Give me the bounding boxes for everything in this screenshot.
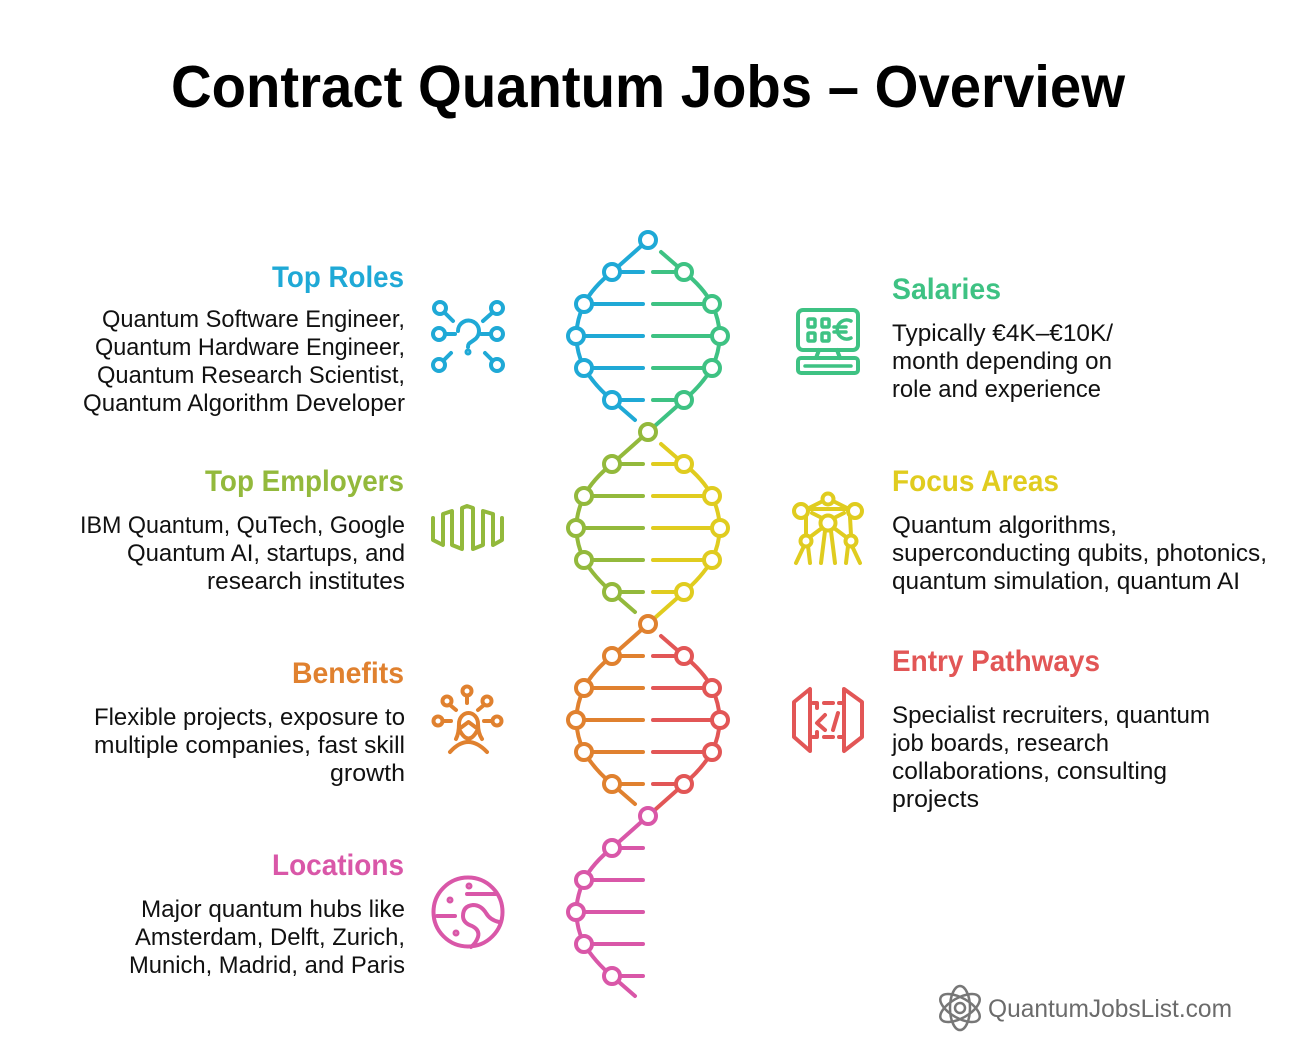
text: top roles list: Quantum Research Scientist,: [97, 362, 405, 389]
panel: locations: [129, 849, 502, 979]
text: locations description: Munich, Madrid, and Paris: [129, 952, 405, 979]
text: benefits description: multiple companies, fast skill: [94, 732, 405, 759]
panel: top employers: [80, 465, 502, 595]
icon: person with connections: [434, 686, 502, 752]
helix strand: red: [648, 636, 720, 816]
heading: focus areas: Focus Areas: [892, 465, 1059, 498]
icon: question network: [433, 302, 503, 371]
panel: entry pathways: [794, 645, 1210, 813]
icon: wave signal: [433, 506, 502, 549]
icon: atomium molecule: [794, 494, 862, 563]
helix strand: yellow: [648, 444, 720, 624]
text: top roles list: Quantum Algorithm Developer: [83, 390, 405, 417]
text: top employers list: research institutes: [207, 568, 405, 595]
panel: top roles: [83, 261, 503, 417]
text: top employers list: IBM Quantum, QuTech, Google: [80, 512, 405, 539]
icon: atom logo: [936, 986, 984, 1030]
text: salaries description: role and experience: [892, 376, 1101, 403]
text: salaries description: Typically €4K–€10K/: [892, 320, 1113, 347]
helix strand: olive: [576, 432, 648, 612]
icon: computer with euro: [798, 310, 858, 373]
text: top roles list: Quantum Software Engineer,: [102, 306, 405, 333]
text: salaries description: month depending on: [892, 348, 1112, 375]
heading: top roles: Top Roles: [272, 261, 404, 294]
text: top roles list: Quantum Hardware Engineer,: [95, 334, 405, 361]
icon: code portal: [794, 689, 862, 751]
text: entry pathways description: job boards, research: [891, 730, 1109, 757]
panel: focus areas: [794, 465, 1267, 595]
text: locations description: [129, 896, 405, 979]
heading: benefits: Benefits: [292, 657, 404, 690]
text: focus areas description: superconducting qubits, photonics,: [892, 540, 1267, 567]
text: benefits description: Flexible projects, exposure to: [94, 704, 405, 731]
helix strand: orange: [576, 624, 648, 804]
text: benefits description: [94, 704, 405, 787]
text: locations description: Amsterdam, Delft, Zurich,: [135, 924, 405, 951]
icon: globe: [434, 878, 502, 947]
text: focus areas description: Quantum algorithms,: [892, 512, 1117, 539]
DNA helix chart: [568, 232, 728, 996]
heading: top employers: Top Employers: [205, 465, 404, 498]
helix strand: green: [648, 252, 720, 432]
footer logo: [936, 986, 1232, 1030]
text: benefits description: growth: [330, 760, 405, 787]
panel: benefits: [94, 657, 502, 787]
text: entry pathways description: collaborations, consulting: [892, 758, 1167, 785]
text: entry pathways description: projects: [892, 786, 979, 813]
heading: entry pathways: Entry Pathways: [892, 645, 1100, 678]
heading: locations: Locations: [272, 849, 404, 882]
helix strand: pink: [576, 816, 648, 996]
text: top employers list: [80, 512, 405, 595]
text: top employers list: Quantum AI, startups, and: [127, 540, 405, 567]
text: focus areas description: quantum simulation, quantum AI: [892, 568, 1240, 595]
footer text: QuantumJobsList.com: [988, 995, 1232, 1023]
heading: salaries: Salaries: [892, 273, 1001, 306]
helix strand: blue: [576, 240, 648, 420]
helix nodes: [568, 232, 728, 984]
title: Contract Quantum Jobs – Overview: [171, 54, 1125, 120]
panel: salaries: [798, 273, 1113, 403]
text: salaries description: [892, 320, 1113, 403]
text: entry pathways description: Specialist recruiters, quantum: [892, 702, 1210, 729]
text: top roles list: [83, 306, 405, 417]
text: locations description: Major quantum hubs like: [141, 896, 405, 923]
text: entry pathways description: [891, 702, 1210, 813]
text: focus areas description: [892, 512, 1267, 595]
